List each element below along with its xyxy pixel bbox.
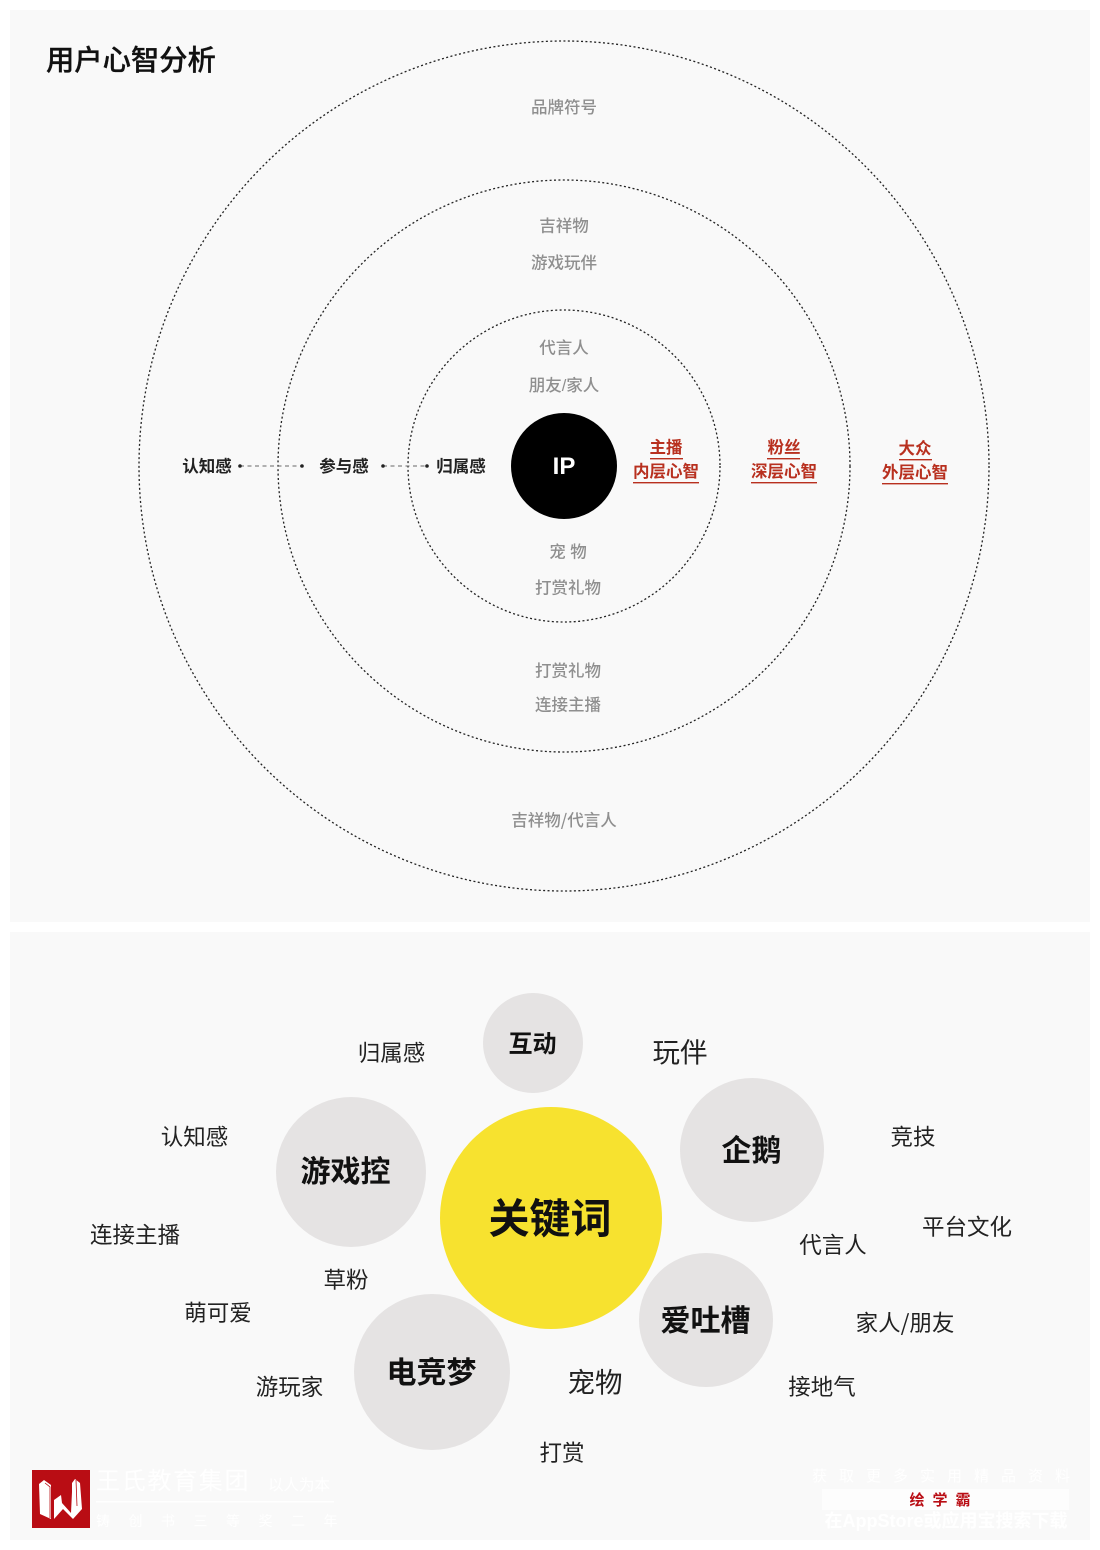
watermark: right promo: 获取更多实用精品资料 [812,1468,1082,1485]
floating keywords: 连接主播 [90,1223,180,1248]
inner ring lower labels: 宠 物 [549,542,587,562]
floating keywords: 打赏 [539,1441,585,1466]
right label: deep layer: 粉丝 [768,438,800,457]
floating keywords: 归属感 [358,1041,425,1066]
watermark text: 铸创书三等奖二年 [96,1513,356,1529]
right label: outer layer [882,439,948,484]
watermark text: 王氏教育集团 [96,1468,250,1495]
bubble: 游戏控 [276,1097,426,1247]
centre IP circle: IP [553,453,575,480]
floating keywords: 接地气 [788,1375,856,1400]
middle ring lower labels: 连接主播 [535,696,602,714]
bubble: 关键词: 关键词 [488,1196,612,1242]
right label: deep layer: 深层心智 [751,461,817,481]
arrow: participation to belonging [381,464,429,468]
concentric dotted rings [139,41,989,891]
inner ring upper labels: 朋友/家人 [529,375,600,395]
bubble: 电竞梦 [354,1294,510,1450]
right label: inner layer: 主播 [650,438,683,457]
floating keywords: 家人/朋友 [856,1306,954,1338]
centre IP circle [511,413,617,519]
inner ring upper labels: 代言人 [539,338,589,358]
bubble: 互动 [483,993,583,1093]
panel: keywords [10,932,1090,1540]
watermark: right promo: 绘学霸 [909,1491,979,1509]
title: 用户心智分析 [46,44,216,76]
right label: outer layer: 大众 [898,439,932,458]
panel: user mind analysis [10,10,1090,922]
floating keywords: 认知感 [161,1125,228,1150]
arrow: cognition to participation [238,464,304,468]
watermark: right promo: 在AppStore或应用宝搜索下载 [824,1510,1068,1531]
floating keywords: 萌可爱 [184,1301,252,1326]
floating keywords: 平台文化 [922,1215,1012,1240]
bubble: 游戏控: 游戏控 [300,1156,390,1189]
right label: inner layer: 内层心智 [633,461,699,481]
floating keywords: 竞技 [890,1125,936,1150]
middle ring upper labels: 吉祥物 [539,216,589,236]
left axis labels [182,456,486,476]
bubble: 互动: 互动 [508,1031,556,1058]
middle ring lower labels: 打赏礼物 [535,662,601,680]
inner ring upper labels [529,338,600,395]
watermark: left logo [32,1468,356,1529]
right label: inner layer [633,438,699,483]
bubble: 企鹅: 企鹅 [722,1135,782,1168]
bubble: 关键词 [440,1107,662,1329]
icon: red W logo [32,1470,90,1528]
middle ring lower labels [535,662,602,714]
floating keywords [90,1037,1012,1466]
right label: outer layer: 外层心智 [882,462,948,482]
middle ring upper labels: 游戏玩伴 [531,254,597,272]
bubble: 爱吐槽 [639,1253,773,1387]
right label: deep layer [751,438,817,483]
bubble: 爱吐槽: 爱吐槽 [660,1305,750,1338]
watermark: right promo [812,1468,1082,1531]
outer ring label: 品牌符号 [531,98,597,117]
bubble: 电竞梦: 电竞梦 [386,1357,476,1390]
inner ring lower labels: 打赏礼物 [535,578,601,598]
left axis labels: 认知感 [182,456,232,476]
middle ring upper labels [531,216,597,272]
left axis labels: 参与感 [319,456,369,476]
outer ring lower label: 吉祥物/代言人 [511,807,617,831]
inner ring lower labels [535,542,601,598]
floating keywords: 草粉 [323,1268,369,1293]
floating keywords: 代言人 [799,1233,867,1258]
watermark text: 以人为本 [268,1476,330,1494]
left axis labels: 归属感 [436,456,486,476]
floating keywords: 游玩家 [256,1375,323,1400]
bubble: 企鹅 [680,1078,824,1222]
watermark text [96,1468,356,1529]
floating keywords: 玩伴 [652,1037,708,1068]
floating keywords: 宠物 [568,1367,622,1398]
